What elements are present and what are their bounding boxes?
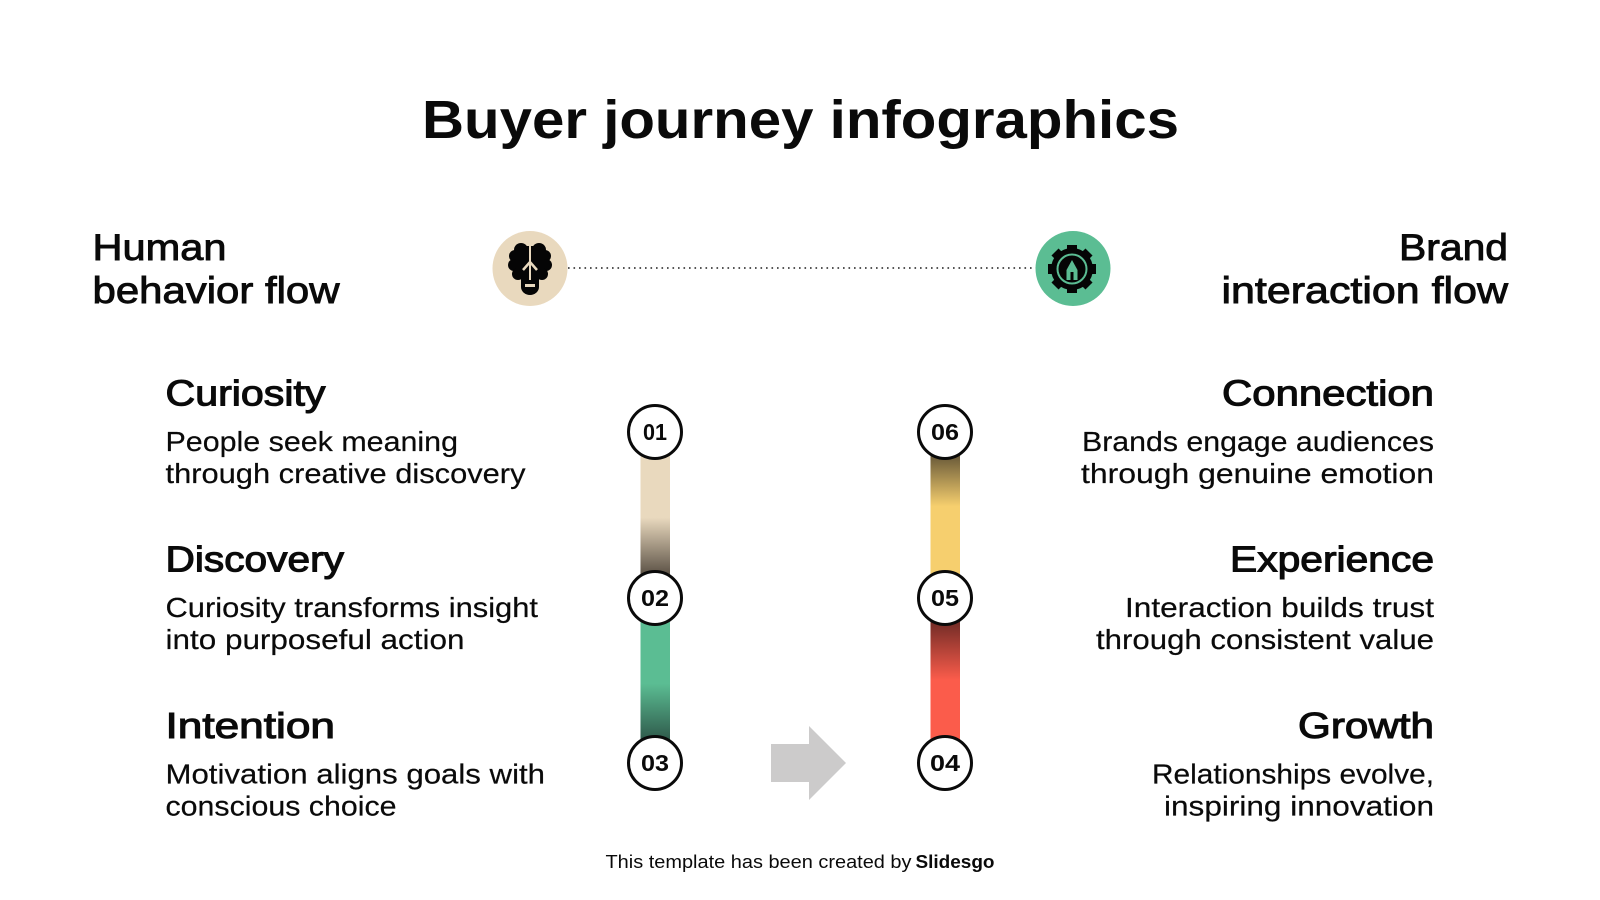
icon: gear with pencil: [1036, 231, 1110, 306]
marker 03: [628, 736, 682, 790]
dotted connector: [568, 267, 1036, 269]
text block: intention: [166, 705, 545, 822]
text block: discovery: [166, 538, 538, 655]
title: Buyer journey infographics: [422, 90, 1179, 150]
marker 04: [918, 736, 972, 790]
text block: experience: Experience: [1230, 538, 1434, 580]
text block: connection: through genuine emotion: [1081, 458, 1434, 489]
bar segment: green to dark: [640, 620, 670, 740]
marker 05: 05: [931, 585, 959, 611]
text block: curiosity: through creative discovery: [166, 458, 526, 489]
text block: curiosity: People seek meaning: [166, 426, 458, 457]
marker 05: [918, 572, 972, 624]
marker 02: [628, 572, 682, 624]
bar segment: dark to yellow: [930, 450, 960, 575]
text block: connection: [1081, 372, 1434, 489]
heading: human behavior flow: [92, 227, 340, 311]
text block: growth: Growth: [1298, 705, 1434, 746]
heading: human behavior flow: behavior flow: [92, 270, 340, 311]
text block: growth: [1152, 705, 1434, 822]
marker 03: 03: [641, 750, 669, 776]
marker 04: 04: [930, 750, 960, 776]
text block: discovery: into purposeful action: [166, 624, 464, 655]
icon: brain with light bulb: [492, 231, 568, 306]
heading: brand interaction flow: Brand: [1399, 227, 1508, 268]
text block: growth: Relationships evolve,: [1152, 758, 1434, 790]
text block: connection: Connection: [1222, 372, 1434, 414]
timeline: right column: [918, 406, 972, 790]
text block: experience: through consistent value: [1096, 624, 1434, 655]
heading: brand interaction flow: interaction flow: [1222, 270, 1508, 311]
marker 06: [918, 406, 972, 458]
footer credit: This template has been created by: [606, 852, 912, 872]
timeline: left column: [628, 406, 682, 790]
text block: experience: [1096, 538, 1434, 655]
marker 01: 01: [643, 419, 667, 445]
marker 06: 06: [931, 419, 959, 445]
text block: intention: conscious choice: [166, 790, 396, 822]
heading: brand interaction flow: [1222, 227, 1508, 311]
text block: growth: inspiring innovation: [1164, 790, 1434, 822]
heading: human behavior flow: Human: [92, 227, 226, 268]
arrow: [771, 726, 846, 800]
marker 02: 02: [641, 585, 669, 611]
text block: discovery: Discovery: [166, 538, 344, 580]
text block: experience: Interaction builds trust: [1125, 592, 1434, 623]
text block: intention: Motivation aligns goals with: [166, 758, 545, 790]
bar segment: dark to red: [930, 620, 960, 740]
text block: curiosity: Curiosity: [166, 372, 326, 414]
text block: curiosity: [166, 372, 526, 489]
text block: connection: Brands engage audiences: [1082, 426, 1434, 457]
text block: intention: Intention: [166, 705, 335, 746]
bar segment: beige to dark: [640, 450, 670, 575]
footer credit: Slidesgo: [916, 852, 995, 872]
marker 01: [628, 406, 682, 458]
text block: discovery: Curiosity transforms insight: [166, 592, 538, 623]
